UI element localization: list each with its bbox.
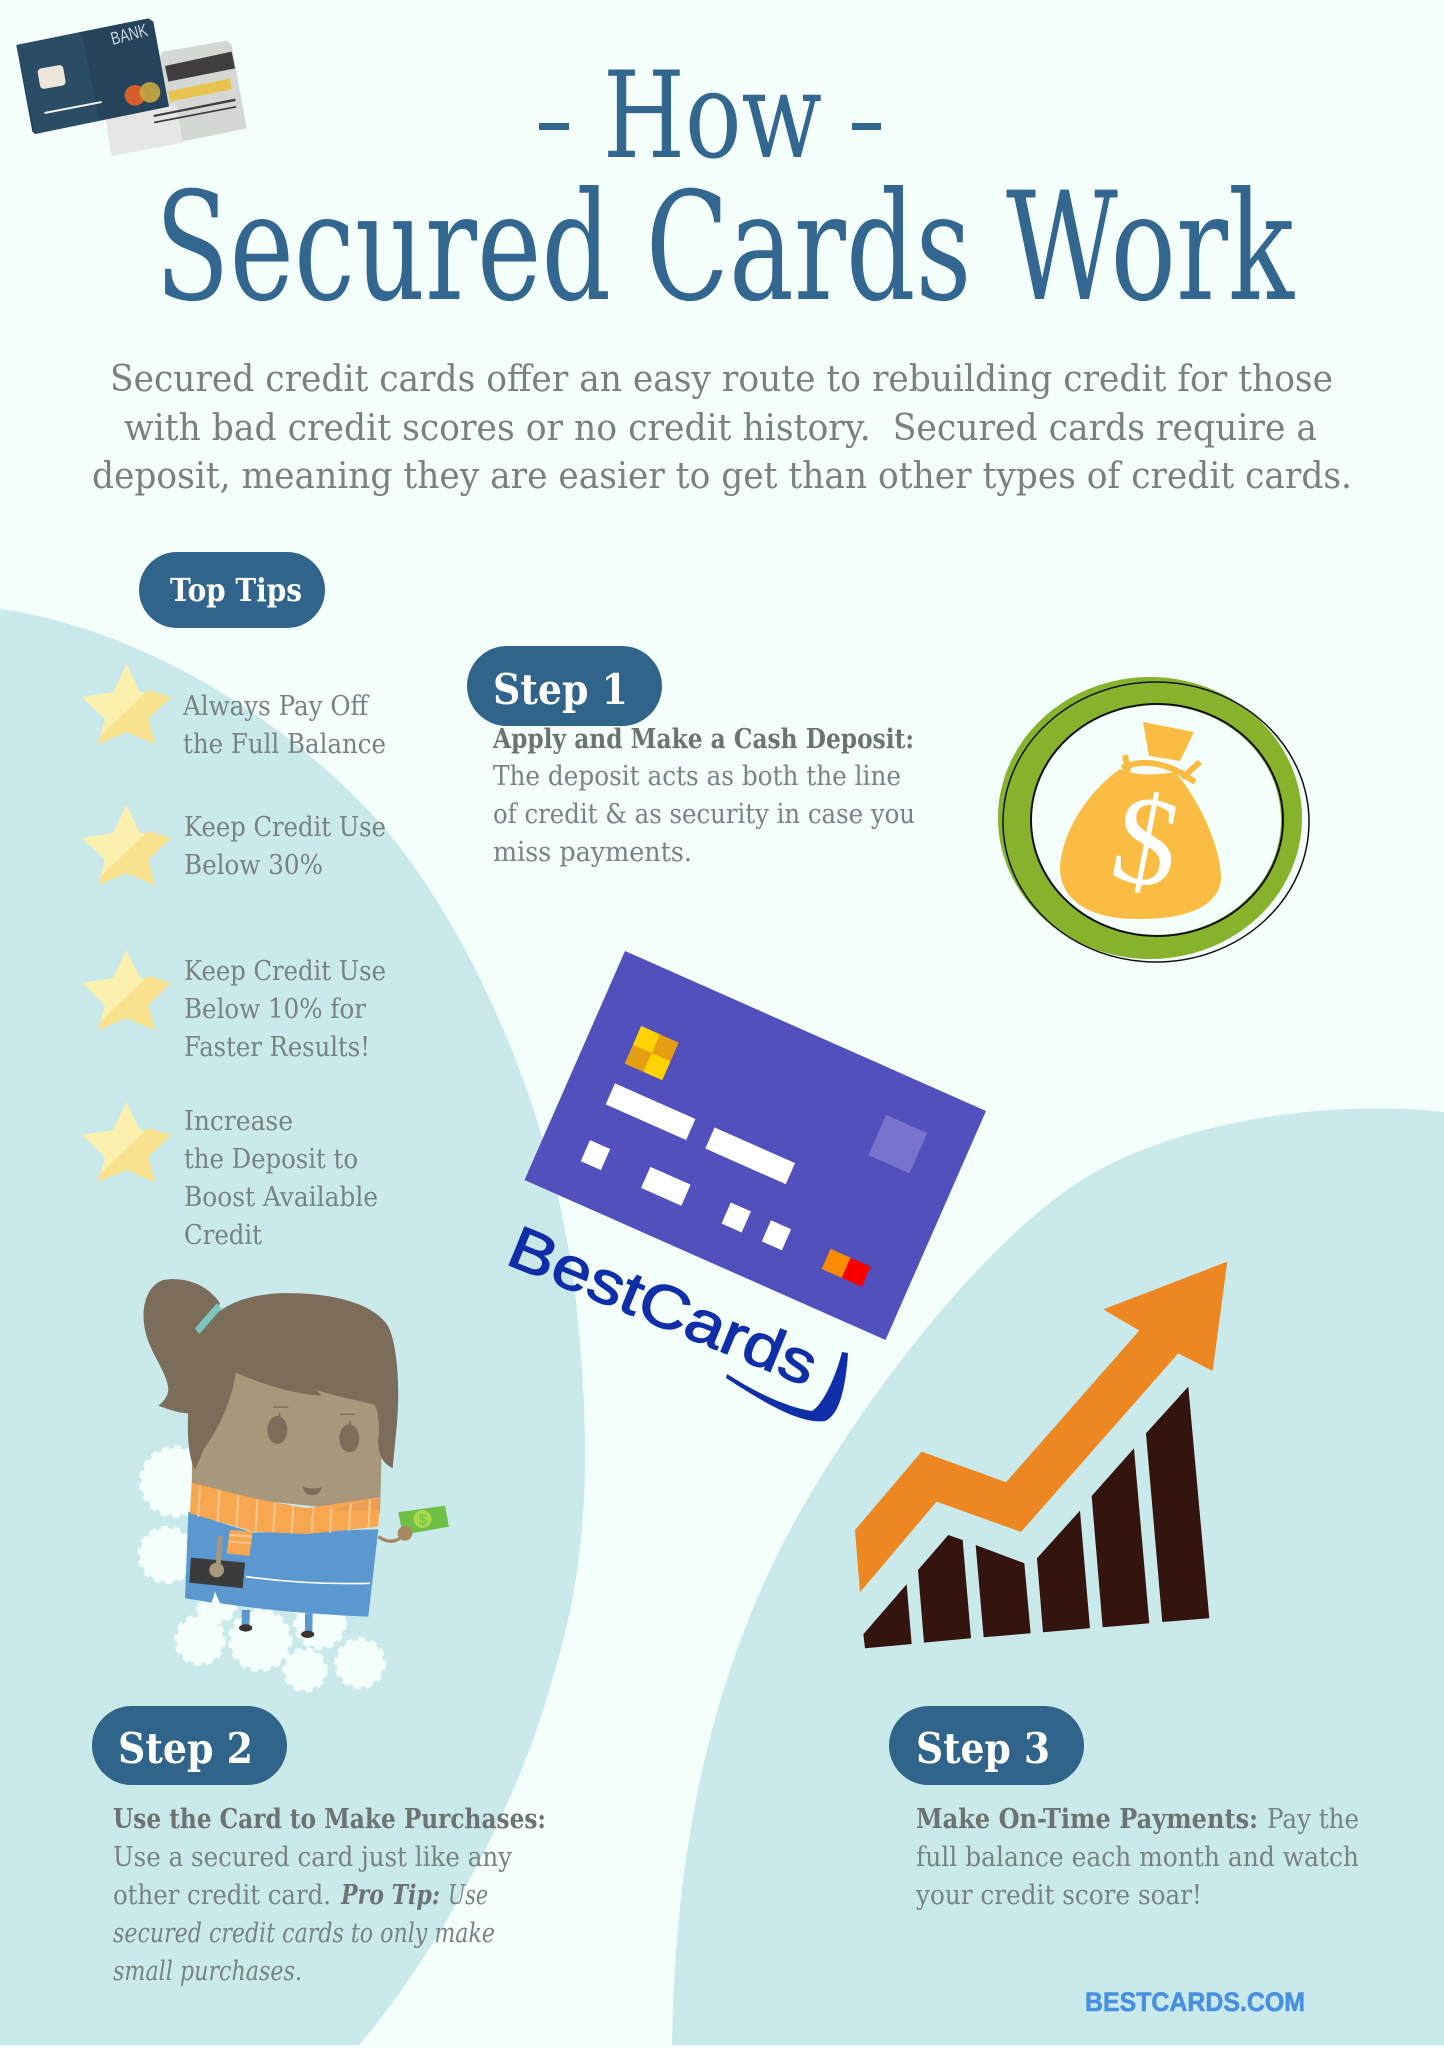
title line: How: How — [603, 47, 822, 186]
step 2 text: Pro Tip: — [340, 1880, 440, 1911]
bars — [863, 1387, 1209, 1648]
step 1 badge: Step 1 — [493, 665, 628, 714]
ponytail — [144, 1279, 220, 1414]
step 1 badge — [467, 646, 662, 726]
legs — [242, 1610, 250, 1627]
step 3 text: Pay the — [1267, 1804, 1359, 1835]
illustration: woman holding money — [140, 1279, 449, 1690]
icon: star — [82, 1102, 171, 1182]
tip 1 — [82, 664, 386, 760]
BestCards logo: BestCards — [499, 1213, 827, 1399]
step 2 text: Use the Card to Make Purchases: — [113, 1804, 546, 1835]
face — [192, 1360, 383, 1513]
icon: star — [82, 950, 171, 1030]
intro text: deposit, meaning they are easier to get than other types of credit cards. — [92, 456, 1352, 497]
step 1 text: miss payments. — [493, 837, 692, 868]
eyes and mouth — [267, 1406, 359, 1495]
step 2 text: other credit card. — [113, 1880, 331, 1911]
step 2 text: small purchases. — [113, 1956, 302, 1987]
intro text — [92, 359, 1352, 497]
tip 1: the Full Balance — [183, 729, 386, 760]
top tips heading: Top Tips — [170, 571, 302, 609]
tip 4: the Deposit to — [184, 1144, 358, 1175]
tip 2: Below 30% — [184, 850, 323, 881]
icon: money bag coin: $ — [1102, 765, 1192, 917]
step 1 text: of credit & as security in case you — [493, 799, 915, 830]
step 1 text: The deposit acts as both the line — [493, 761, 901, 792]
icon: bank cards: BANK — [109, 20, 150, 49]
tip 3: Below 10% for — [184, 994, 366, 1025]
tip 4: Increase — [184, 1106, 293, 1137]
step 3 badge — [889, 1706, 1084, 1785]
BestCards logo — [499, 1213, 848, 1421]
tip 2 — [82, 805, 386, 885]
step 2 badge — [92, 1706, 287, 1785]
hair — [188, 1293, 398, 1470]
card chip — [625, 1026, 679, 1080]
step 1 text — [492, 724, 915, 868]
step 2 text: Use a secured card just like any — [113, 1842, 513, 1873]
step 2 text — [113, 1804, 546, 1987]
step 2 badge: Step 2 — [118, 1724, 253, 1773]
step 3 text: Make On-Time Payments: — [916, 1804, 1258, 1835]
step 3 text: your credit score soar! — [915, 1880, 1202, 1911]
icon: money bag coin — [998, 677, 1309, 962]
title — [155, 47, 1295, 335]
snow puffs — [140, 1448, 383, 1690]
left background shape — [0, 609, 585, 2045]
tip 4: Credit — [184, 1220, 262, 1251]
arm and banknote — [398, 1506, 449, 1535]
step 3 text — [915, 1804, 1359, 1911]
step 1 text: Apply and Make a Cash Deposit: — [492, 724, 914, 755]
website footer: BESTCARDS.COM — [1085, 1987, 1305, 2017]
chart: rising bars and arrow — [855, 1262, 1227, 1648]
right background shape — [672, 1108, 1444, 2045]
tip 3 — [82, 950, 386, 1063]
step 2 text: Use — [448, 1880, 488, 1911]
scarf — [190, 1483, 380, 1534]
step 3 text: full balance each month and watch — [916, 1842, 1359, 1873]
illustration: woman holding money: $ — [419, 1512, 427, 1528]
intro text: with bad credit scores or no credit history. Secured cards require a — [124, 408, 1317, 449]
tip 2: Keep Credit Use — [184, 812, 386, 843]
icon: credit card — [524, 951, 986, 1340]
intro text: Secured credit cards offer an easy route to rebuilding credit for those — [110, 359, 1333, 400]
tip 3: Faster Results! — [184, 1032, 370, 1063]
icon: bank cards — [16, 18, 247, 156]
top tips heading — [139, 552, 325, 628]
scarf tail — [227, 1530, 253, 1556]
step 2 text: secured credit cards to only make — [113, 1918, 495, 1949]
tip 3: Keep Credit Use — [184, 956, 386, 987]
tip 1: Always Pay Off — [182, 691, 370, 722]
step 3 badge: Step 3 — [916, 1724, 1050, 1773]
tip 4: Boost Available — [184, 1182, 378, 1213]
bag — [189, 1558, 245, 1588]
icon: star — [82, 664, 171, 744]
icon: star — [82, 805, 171, 885]
hair band — [195, 1303, 222, 1334]
body — [185, 1512, 378, 1617]
tip 4 — [82, 1102, 378, 1251]
arrow — [855, 1262, 1227, 1592]
